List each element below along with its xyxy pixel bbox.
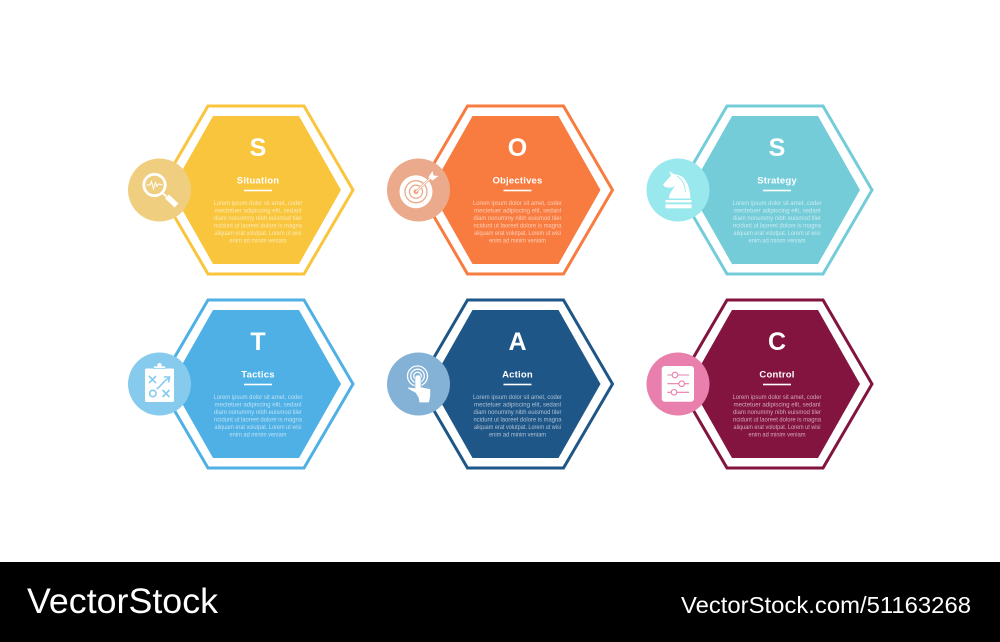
text block: Control — [732, 395, 822, 438]
text block: Objectives: Lorem ipsum dolor sit amet, coder — [473, 201, 562, 207]
footer logo: VectorStock — [27, 582, 219, 621]
icon: sliders — [646, 352, 710, 416]
text block: Action: diam nonummy nibh euismod tiler — [474, 410, 562, 416]
letter: O: O — [508, 134, 527, 162]
footer image id: VectorStock.com/51163268 — [681, 592, 971, 618]
text block: Strategy: ncidunt ut laoreet dolore is magna — [733, 224, 822, 230]
panel: Strategy — [646, 106, 872, 274]
text block: Control: aliquam erat volutpat. Lorem ut wisi — [734, 425, 820, 431]
text block: Tactics — [214, 395, 303, 438]
panel: Tactics — [128, 300, 353, 468]
text block: Tactics: Lorem ipsum dolor sit amet, coder — [214, 395, 303, 401]
text block: Situation: diam nonummy nibh euismod tiler — [214, 216, 302, 222]
letter: S: S — [250, 134, 266, 162]
text block: Action: mectetuer adipiscing elit, sedanl — [474, 402, 561, 408]
text block: Situation: enim ad minim veniam — [230, 238, 286, 244]
text block: Objectives — [473, 201, 562, 244]
text block: Situation — [214, 201, 303, 244]
text block: Tactics: enim ad minim veniam — [230, 432, 286, 438]
text block: Tactics: mectetuer adipiscing elit, sedanl — [214, 402, 302, 408]
icon: magnifying glass — [128, 158, 191, 222]
panel: Situation — [128, 106, 353, 274]
heading: Strategy: Strategy — [757, 176, 797, 186]
heading: Objectives: Objectives — [492, 176, 543, 186]
text block: Objectives: mectetuer adipiscing elit, sedanl — [474, 208, 561, 214]
text block: Tactics: aliquam erat volutpat. Lorem ut wisi — [214, 425, 302, 431]
text block: Strategy: Lorem ipsum dolor sit amet, coder — [732, 201, 822, 207]
text block: Control: ncidunt ut laoreet dolore is magna — [733, 418, 822, 424]
panel: Control — [646, 300, 872, 468]
text block: Objectives: diam nonummy nibh euismod tiler — [474, 216, 562, 222]
text block: Tactics: ncidunt ut laoreet dolore is magna — [214, 418, 303, 424]
text block: Strategy: enim ad minim veniam — [748, 238, 806, 244]
text block: Objectives: enim ad minim veniam — [489, 238, 546, 244]
text block: Control: mectetuer adipiscing elit, sedanl — [734, 402, 820, 408]
letter: T: T — [250, 328, 266, 356]
letter: S: S — [769, 134, 785, 162]
heading: Situation: Situation — [237, 176, 279, 186]
letter: C: C — [768, 328, 786, 356]
text block: Objectives: aliquam erat volutpat. Lorem ut wisi — [474, 231, 561, 237]
heading: Tactics: Tactics — [241, 370, 275, 380]
icon: target with arrow — [387, 158, 450, 222]
text block: Situation: mectetuer adipiscing elit, sedanl — [214, 208, 302, 214]
panel: Objectives — [387, 106, 612, 274]
panel: Action — [387, 300, 612, 468]
text block: Action: Lorem ipsum dolor sit amet, coder — [473, 395, 562, 401]
text block: Situation: aliquam erat volutpat. Lorem ut wisi — [214, 231, 302, 237]
text block: Control: enim ad minim veniam — [748, 432, 806, 438]
icon: tactics clipboard — [128, 352, 191, 416]
text block: Tactics: diam nonummy nibh euismod tiler — [214, 410, 302, 416]
text block: Situation: Lorem ipsum dolor sit amet, coder — [214, 201, 303, 207]
text block: Strategy — [732, 201, 822, 244]
text block: Action — [473, 395, 562, 438]
text block: Strategy: aliquam erat volutpat. Lorem ut wisi — [734, 231, 820, 237]
text block: Action: enim ad minim veniam — [489, 432, 546, 438]
letter: A: A — [508, 328, 527, 356]
icon: touch hand — [387, 352, 450, 416]
text block: Strategy: mectetuer adipiscing elit, sedanl — [734, 208, 820, 214]
text block: Action: aliquam erat volutpat. Lorem ut wisi — [474, 425, 561, 431]
text block: Strategy: diam nonummy nibh euismod tiler — [733, 216, 821, 222]
footer bar — [0, 562, 1000, 642]
icon: chess knight — [646, 158, 710, 222]
text block: Action: ncidunt ut laoreet dolore is magna — [474, 418, 562, 424]
text block: Control: diam nonummy nibh euismod tiler — [733, 410, 821, 416]
text block: Objectives: ncidunt ut laoreet dolore is magna — [474, 224, 562, 230]
text block: Situation: ncidunt ut laoreet dolore is magna — [214, 224, 303, 230]
heading: Control: Control — [759, 370, 795, 380]
heading: Action: Action — [502, 370, 533, 380]
text block: Control: Lorem ipsum dolor sit amet, coder — [732, 395, 822, 401]
